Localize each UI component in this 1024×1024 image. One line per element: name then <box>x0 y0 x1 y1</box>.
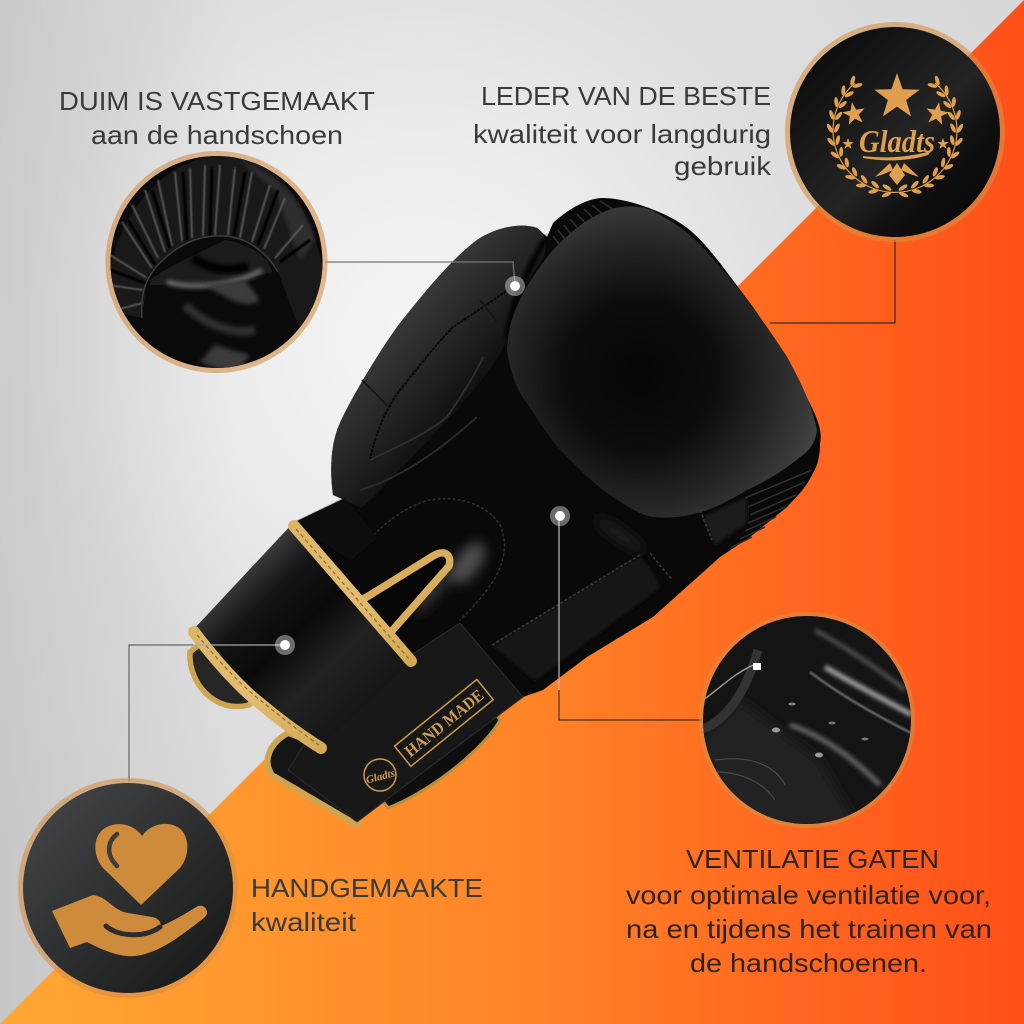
text: ventilation: de handschoenen. <box>690 948 927 978</box>
wreath <box>833 83 957 192</box>
wrinkled leather top <box>105 155 328 330</box>
text: leather: kwaliteit voor langdurig <box>473 119 771 149</box>
wordmark: Gladts <box>859 123 935 159</box>
thumb seams <box>360 290 507 490</box>
connector lines <box>129 240 895 782</box>
text: leather: LEDER VAN DE BESTE <box>481 81 771 111</box>
text: ventilation: VENTILATIE GATEN <box>686 844 939 874</box>
knuckle pad <box>507 206 817 518</box>
text: handmade <box>251 873 483 937</box>
text: thumb heading: DUIM IS VASTGEMAAKT <box>59 86 375 116</box>
vent holes <box>788 702 796 706</box>
stars <box>874 73 920 116</box>
text: ventilation <box>626 844 992 978</box>
strap stitches <box>197 529 409 745</box>
highlights <box>825 667 912 715</box>
gold slot <box>362 553 450 632</box>
top wrinkles <box>553 201 614 248</box>
text: thumb heading <box>59 86 375 150</box>
thumb <box>331 226 546 508</box>
gladts logo <box>826 73 964 199</box>
text: leather: gebruik <box>674 151 772 181</box>
panel: thumb detail circle <box>105 151 328 375</box>
text: ventilation: na en tijdens het trainen van <box>626 914 992 944</box>
text: handmade: kwaliteit <box>251 907 357 937</box>
icon: heart <box>95 824 187 905</box>
panel: logo detail circle <box>785 22 1005 242</box>
marker: thumb <box>505 276 525 296</box>
marker: strap <box>275 635 295 655</box>
boxing glove <box>190 198 821 825</box>
text: ventilation: voor optimale ventilatie voor, <box>626 880 991 910</box>
hand made badge: HAND MADE <box>401 686 487 761</box>
strap gold lower edge <box>194 632 321 748</box>
icon: hand <box>52 895 207 956</box>
text: leather <box>473 81 772 181</box>
thumb-pad crease <box>507 237 547 340</box>
lower palm pad <box>492 555 661 681</box>
hand made panel <box>288 623 523 822</box>
wrist-side wrinkles <box>732 470 812 547</box>
panel: handmade icon circle <box>18 778 238 998</box>
palm sheen <box>407 513 648 618</box>
cuff folds <box>293 498 378 560</box>
left buckle loop <box>190 640 262 707</box>
strap <box>193 523 413 747</box>
panel: ventilation detail circle <box>699 612 915 830</box>
swoosh and arrows <box>863 151 931 160</box>
side patch <box>703 497 747 545</box>
text: handmade: HANDGEMAAKTE <box>251 873 483 903</box>
leather arch <box>142 236 278 318</box>
marker: ventilation <box>550 506 570 526</box>
lower gold strap part <box>360 690 500 808</box>
small round logo: Gladts <box>365 767 396 787</box>
small round logo <box>364 759 396 791</box>
glove body <box>293 198 821 697</box>
lower buckle loop <box>268 733 370 825</box>
palm seams <box>353 499 712 645</box>
text: thumb heading: aan de handschoen <box>91 120 343 150</box>
strap gold upper edge <box>294 526 411 661</box>
